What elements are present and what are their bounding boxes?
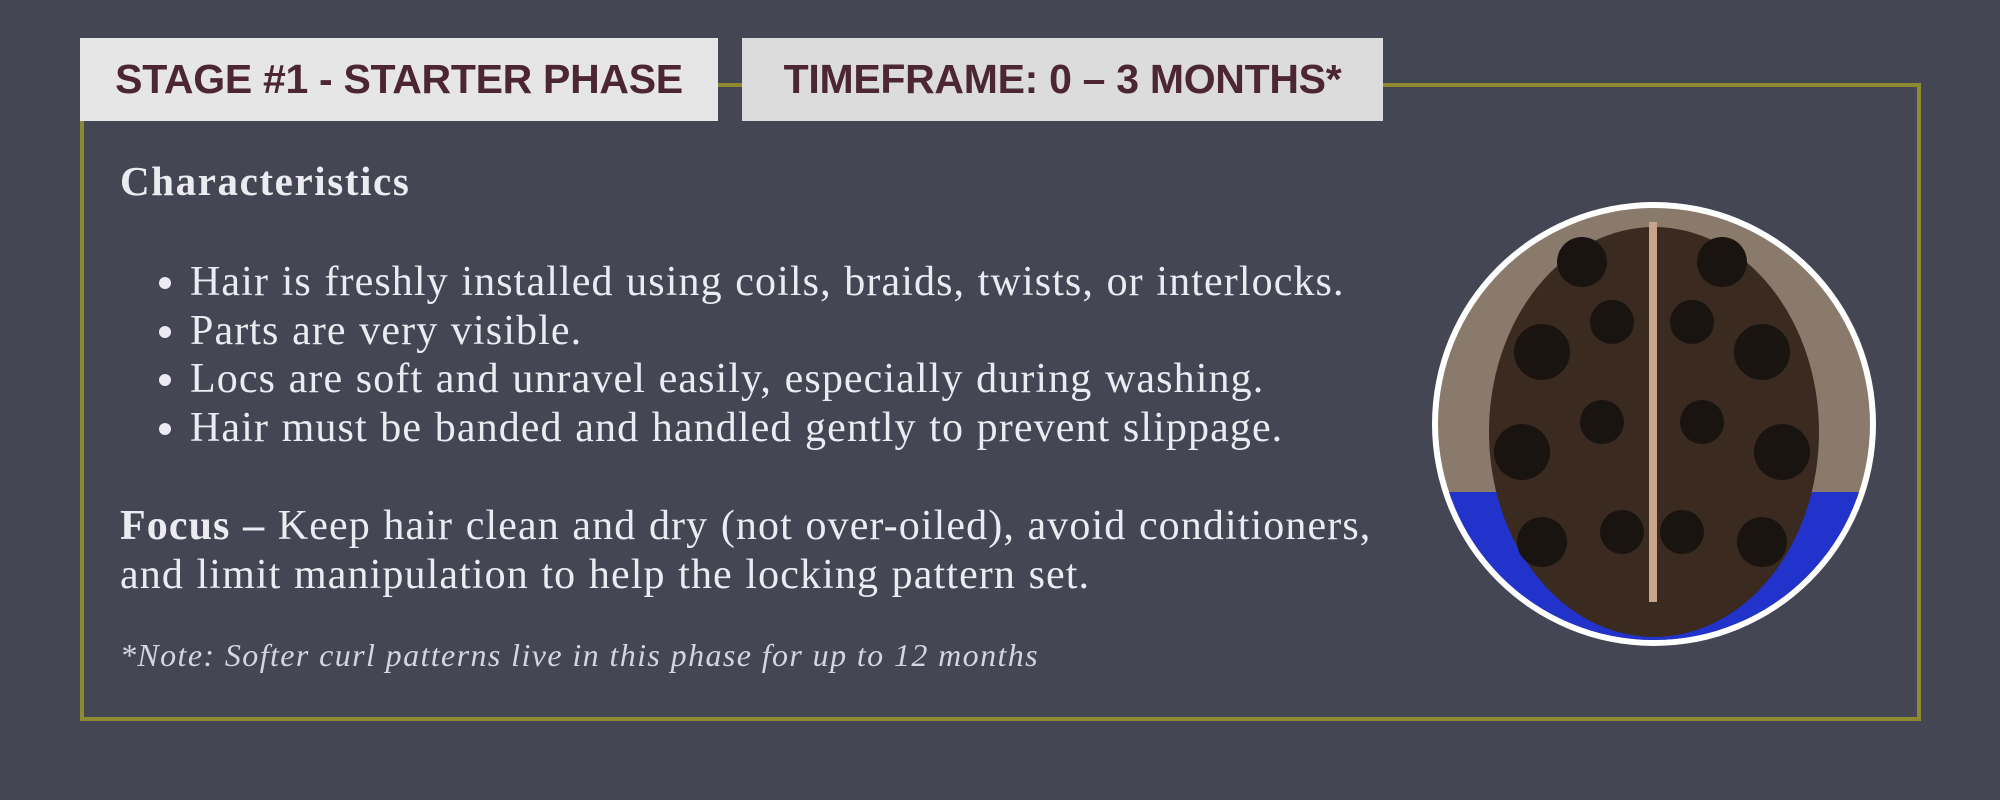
focus text — [120, 503, 1371, 598]
focus text: and limit manipulation to help the locking pattern set. — [120, 552, 1090, 598]
focus text: Focus – Keep hair clean and dry (not over-oiled), avoid conditioners, — [120, 503, 1371, 549]
photo: circular hair image — [1432, 202, 1876, 646]
panel frame — [80, 83, 1921, 721]
bullet list — [159, 259, 1345, 450]
tab: timeframe: TIMEFRAME: 0 – 3 MONTHS* — [784, 56, 1341, 102]
note: *Note: Softer curl patterns live in this phase for up to 12 months — [120, 637, 1039, 673]
bullet list: Hair must be banded and handled gently to prevent slippage. — [190, 404, 1283, 450]
tab: timeframe — [742, 38, 1383, 121]
tab: stage title: STAGE #1 - STARTER PHASE — [115, 56, 683, 102]
bullet list: Locs are soft and unravel easily, especially during washing. — [190, 356, 1264, 402]
heading: characteristics: Characteristics — [120, 158, 410, 204]
bullet list: Hair is freshly installed using coils, braids, twists, or interlocks. — [190, 259, 1345, 305]
bullet list: Parts are very visible. — [190, 308, 582, 354]
tab: stage title — [80, 38, 718, 121]
